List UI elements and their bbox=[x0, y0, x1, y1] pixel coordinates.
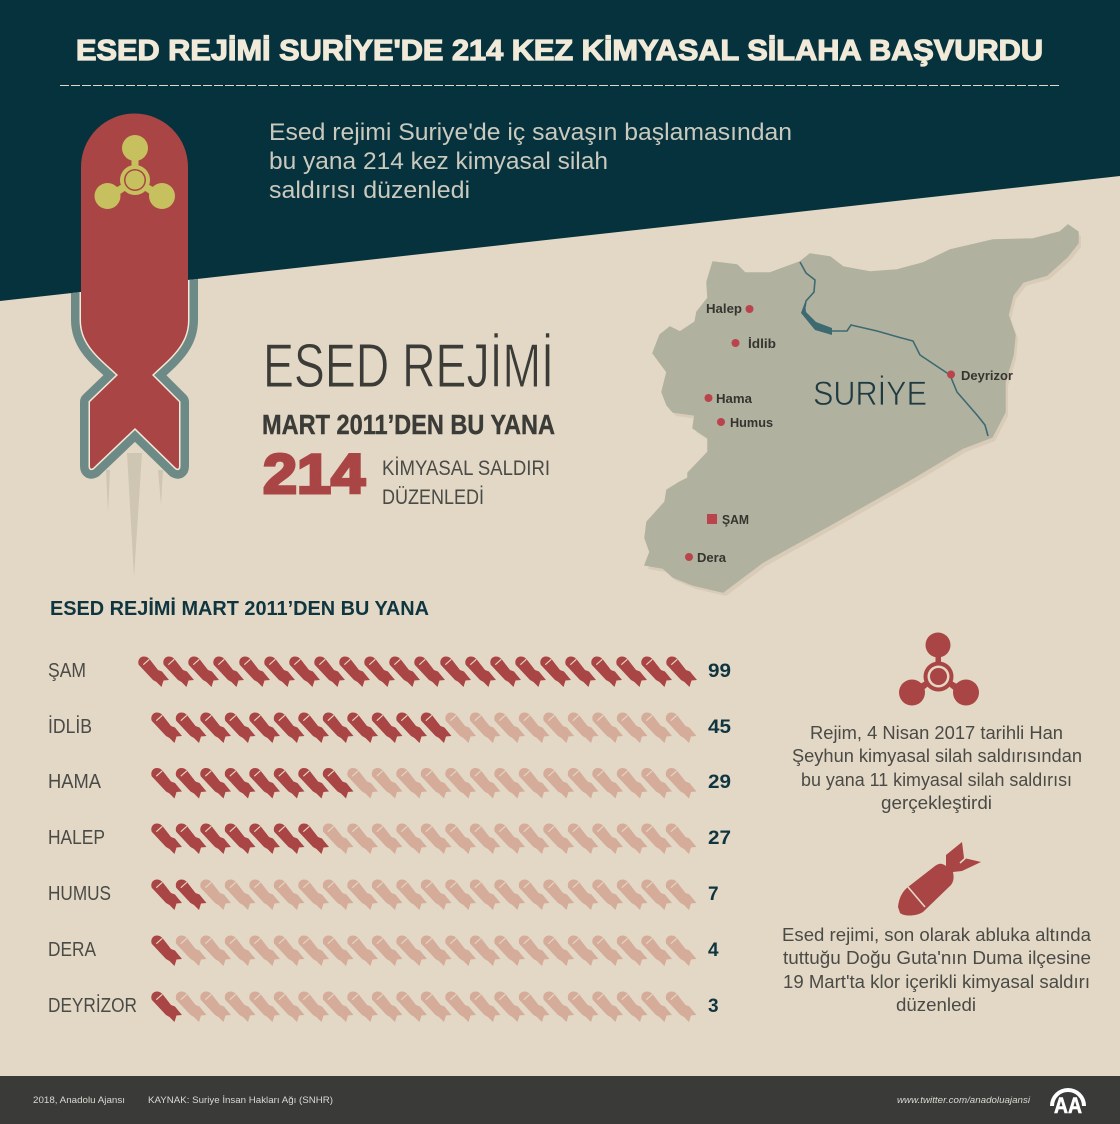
pictogram row: Şam 99: 99 bbox=[708, 661, 731, 682]
bomb smoke trails bbox=[106, 453, 163, 577]
pictogram row: Humus 7: HUMUS bbox=[48, 883, 111, 905]
intro text: saldırısı düzenledi bbox=[269, 177, 470, 204]
intro text bbox=[269, 119, 792, 204]
city: İdlib bbox=[732, 336, 776, 351]
chemical weapon symbol on bomb bbox=[94, 135, 175, 209]
city: Humus: Humus bbox=[730, 415, 773, 430]
headline block bbox=[262, 331, 555, 509]
callout text: Duma chlorine attack: Esed rejimi, son olarak abluka altında bbox=[782, 925, 1092, 945]
intro text: Esed rejimi Suriye'de iç savaşın başlamasından bbox=[269, 119, 792, 146]
callout text: since 4 April 2017: bu yana 11 kimyasal silah saldırısı bbox=[801, 770, 1072, 790]
callout text: Duma chlorine attack: 19 Mart'ta klor içerikli kimyasal saldırı bbox=[783, 972, 1090, 992]
pictogram row: Hama 29: 29 bbox=[708, 772, 731, 793]
city: Hama: Hama bbox=[716, 391, 753, 406]
map label: SURİYE: SURİYE bbox=[813, 375, 927, 413]
icon: large falling bomb with chemical symbol bbox=[81, 114, 188, 577]
pictogram row: Dera 4: 4 bbox=[708, 940, 719, 961]
pictogram row: Humus 7 bbox=[48, 879, 719, 910]
callout text: Duma chlorine attack: düzenledi bbox=[896, 995, 976, 1015]
caption beside number: KİMYASAL SALDIRI bbox=[382, 456, 550, 480]
pictogram row: İdlib 45 bbox=[48, 712, 731, 743]
city: Halep: Halep bbox=[706, 301, 742, 316]
callout text: Duma chlorine attack bbox=[782, 925, 1092, 1015]
callout text: since 4 April 2017: Şeyhun kimyasal silah saldırısından bbox=[792, 746, 1082, 766]
pictogram row: Humus 7: 7 bbox=[708, 884, 719, 905]
footer: twitter address: www.twitter.com/anadoluajansi bbox=[897, 1095, 1031, 1106]
headline: ESED REJİMİ: ESED REJİMİ bbox=[263, 331, 554, 401]
pictogram row: Halep 27: 27 bbox=[708, 828, 731, 849]
pictogram row: İdlib 45: İDLİB bbox=[48, 715, 92, 738]
callout text: since 4 April 2017 bbox=[792, 723, 1082, 813]
caption beside number: DÜZENLEDİ bbox=[382, 485, 484, 509]
city: İdlib: İdlib bbox=[748, 336, 776, 351]
city: Dera: Dera bbox=[697, 550, 727, 565]
logo: Anadolu Agency: AA bbox=[1054, 1093, 1082, 1118]
pictogram row: Halep 27 bbox=[48, 823, 731, 854]
pictogram row: Dera 4 bbox=[48, 935, 719, 966]
city: Şam: ŞAM bbox=[722, 512, 749, 527]
city: Dera bbox=[685, 550, 727, 565]
pictogram row: Dera 4: DERA bbox=[48, 939, 97, 961]
pictogram row: Deyrizor 3 bbox=[48, 991, 719, 1022]
pictogram row: Şam 99: ŞAM bbox=[48, 660, 86, 682]
callout text: since 4 April 2017: gerçekleştirdi bbox=[881, 793, 992, 813]
icon: bomb bbox=[898, 842, 981, 916]
pictogram row: İdlib 45: 45 bbox=[708, 717, 731, 738]
footer: source: KAYNAK: Suriye İnsan Hakları Ağı (SNHR) bbox=[148, 1095, 333, 1106]
footer bar bbox=[0, 1076, 1120, 1124]
title: ESED REJİMİ SURİYE'DE 214 KEZ KİMYASAL SİLAHA BAŞVURDU bbox=[76, 35, 1043, 67]
pictogram row: Hama 29 bbox=[48, 768, 731, 798]
pictogram row: Hama 29: HAMA bbox=[48, 771, 102, 793]
icon: chemical weapon symbol bbox=[899, 632, 979, 706]
pictogram row: Şam 99 bbox=[48, 656, 731, 687]
city: Deyrizor: Deyrizor bbox=[961, 368, 1013, 383]
intro text: bu yana 214 kez kimyasal silah bbox=[269, 148, 608, 175]
big number 214: 214 bbox=[263, 442, 365, 505]
caption beside number bbox=[382, 456, 550, 509]
background: dark teal header band bbox=[0, 0, 1120, 301]
pictogram row: Halep 27: HALEP bbox=[48, 827, 105, 849]
pictogram row: Deyrizor 3: DEYRİZOR bbox=[48, 994, 137, 1017]
pictogram row: Deyrizor 3: 3 bbox=[708, 996, 719, 1017]
callout text: Duma chlorine attack: tuttuğu Doğu Guta'nın Duma ilçesine bbox=[783, 948, 1091, 968]
section heading: ESED REJİMİ MART 2011’DEN BU YANA bbox=[50, 597, 429, 620]
callout text: since 4 April 2017: Rejim, 4 Nisan 2017 tarihli Han bbox=[810, 723, 1063, 743]
subheadline: MART 2011’DEN BU YANA bbox=[262, 409, 555, 440]
river: Euphrates bbox=[800, 262, 988, 436]
footer: copyright: 2018, Anadolu Ajansı bbox=[33, 1095, 125, 1106]
map: Syria bbox=[645, 225, 1081, 596]
city: Şam bbox=[707, 512, 749, 527]
